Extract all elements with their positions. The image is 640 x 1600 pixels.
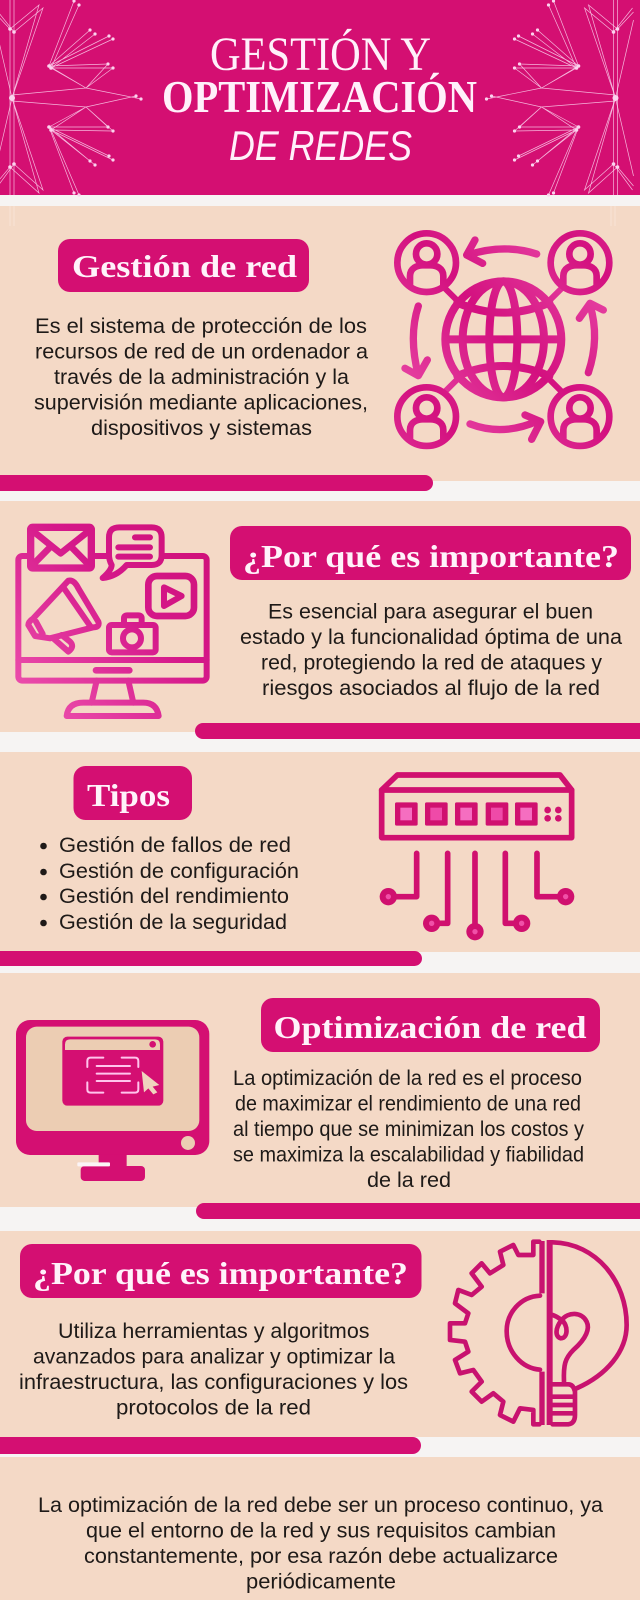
text: why it matters xyxy=(240,600,622,700)
text: definition of optimization: de la red xyxy=(367,1168,451,1192)
text: definition of network management: través de la administración y la xyxy=(54,365,349,389)
text: why it matters: red, protegiendo la red de ataques y xyxy=(261,650,602,674)
heading: ¿Por qué es importante? (2) xyxy=(20,1244,422,1298)
text: definition of network management: supervisión mediante aplicaciones, xyxy=(34,390,368,414)
text: definition of optimization: de maximizar el rendimiento de una red xyxy=(235,1092,581,1116)
heading: Optimización de red: Optimización de red xyxy=(274,1009,587,1045)
header banner xyxy=(0,0,640,226)
title: OPTIMIZACIÓN xyxy=(162,71,477,122)
text: why it matters: riesgos asociados al flujo de la red xyxy=(262,676,600,700)
text: why it matters: Es esencial para asegurar el buen xyxy=(268,600,593,624)
text: definition of network management: Es el sistema de protección de los xyxy=(35,314,367,338)
list: types of management: Gestión de fallos de red xyxy=(59,833,291,857)
divider bar 3 xyxy=(0,951,640,973)
text: closing statement: que el entorno de la red y sus requisitos cambian xyxy=(86,1518,556,1542)
text: definition of network management: dispositivos y sistemas xyxy=(91,416,312,440)
divider bar 2 xyxy=(0,723,640,752)
text: definition of optimization: al tiempo que se minimizan los costos y xyxy=(233,1117,584,1141)
text: closing statement: periódicamente xyxy=(246,1570,396,1594)
heading: ¿Por qué es importante? (1) xyxy=(230,526,631,580)
icon: computer with window and cursor xyxy=(16,1020,209,1181)
text: definition of optimization: La optimización de la red es el proceso xyxy=(233,1066,582,1090)
heading: Gestión de red xyxy=(58,239,309,292)
heading: Tipos xyxy=(74,766,192,820)
text: definition of network management xyxy=(34,314,368,440)
icon: globe with users and arrows xyxy=(397,233,609,446)
text: definition of optimization: se maximiza la escalabilidad y fiabilidad xyxy=(233,1142,584,1166)
decoration: left network star xyxy=(0,0,143,197)
text: closing statement: constantemente, por esa razón debe actualizarce xyxy=(84,1544,558,1568)
text: why it matters: estado y la funcionalidad óptima de una xyxy=(240,625,622,649)
text: closing statement: La optimización de la red debe ser un proceso continuo, ya xyxy=(38,1493,603,1517)
icon: network switch xyxy=(380,775,574,940)
list: types of management: Gestión del rendimiento xyxy=(59,884,289,908)
decoration: right network star xyxy=(485,0,634,197)
list: types of management: Gestión de la seguridad xyxy=(59,910,287,934)
heading: Optimización de red xyxy=(261,998,600,1052)
heading: ¿Por qué es importante? (2): ¿Por qué es importante? xyxy=(33,1255,408,1291)
text: how optimization works: Utiliza herramientas y algoritmos xyxy=(58,1319,370,1343)
icon: monitor with media xyxy=(18,527,207,716)
heading: Gestión de red: Gestión de red xyxy=(72,248,297,284)
icon: half gear half light bulb xyxy=(450,1240,627,1425)
text: how optimization works xyxy=(19,1319,408,1420)
text: how optimization works: infraestructura, las configuraciones y los xyxy=(19,1370,408,1394)
title: GESTIÓN Y xyxy=(210,27,431,81)
divider bar 4 xyxy=(0,1203,640,1231)
heading: Tipos: Tipos xyxy=(87,777,170,813)
divider bar 5 xyxy=(0,1437,640,1457)
divider bar 1 xyxy=(0,475,640,501)
text: how optimization works: avanzados para analizar y optimizar la xyxy=(33,1344,395,1368)
list: types of management: Gestión de configuración xyxy=(59,859,299,883)
title xyxy=(162,27,477,169)
text: closing statement xyxy=(38,1493,603,1594)
list: types of management xyxy=(40,833,299,934)
heading: ¿Por qué es importante? (1): ¿Por qué es importante? xyxy=(243,538,619,574)
text: definition of network management: recursos de red de un ordenador a xyxy=(35,340,368,364)
title: DE REDES xyxy=(229,122,412,169)
text: how optimization works: protocolos de la red xyxy=(116,1396,311,1420)
text: definition of optimization xyxy=(233,1066,584,1192)
